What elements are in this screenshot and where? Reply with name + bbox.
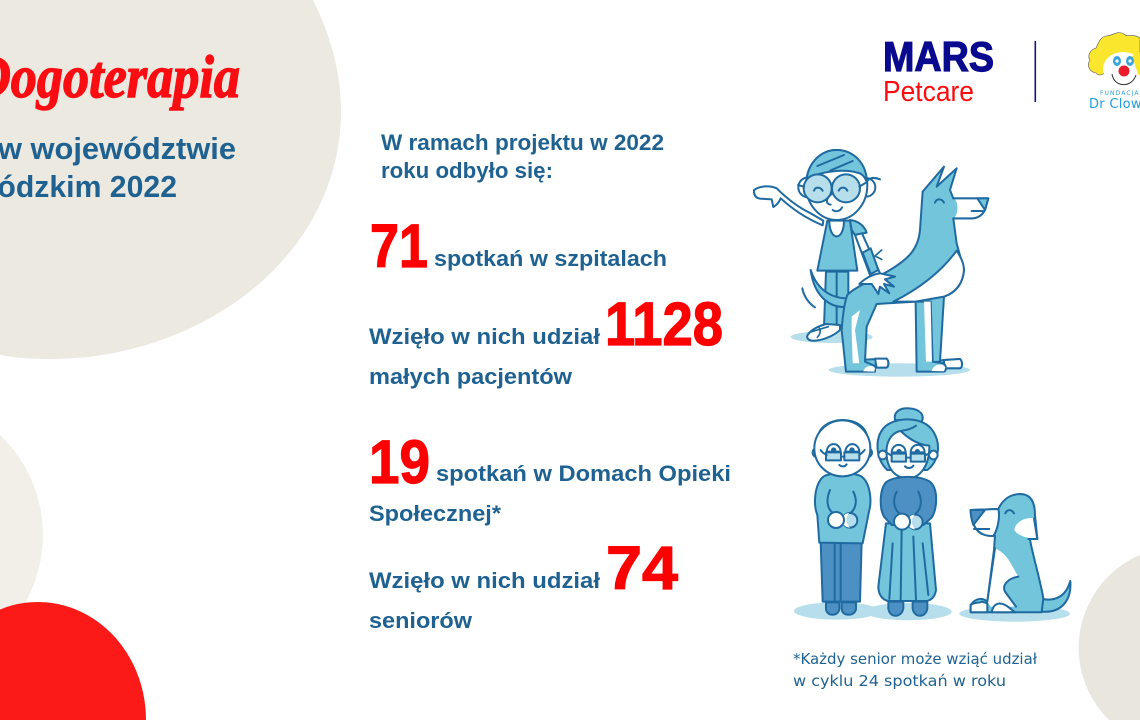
footnote: w cyklu 24 spotkań w roku [793, 672, 1006, 690]
logo: Fundacja Dr Clown: FUNDACJA [1100, 90, 1140, 97]
stat: 71 meetings in hospitals: 71 [370, 212, 428, 280]
subtitle [0, 131, 236, 204]
footnote: *Każdy senior może wziąć udział [793, 650, 1038, 668]
background shape: beige bottom right [1079, 555, 1140, 720]
stat: 74 seniors: Wzięło w nich udział [369, 568, 600, 593]
background shape: large beige [0, 0, 341, 359]
stat: 19 meetings in care homes: spotkań w Domach Opieki [436, 461, 731, 486]
background shape: red bottom left [0, 602, 146, 720]
logo: Fundacja Dr Clown [1088, 33, 1140, 112]
intro text [381, 130, 664, 183]
stat: 71 meetings in hospitals: spotkań w szpitalach [434, 246, 667, 271]
logo divider [1034, 41, 1036, 102]
stat: 71 meetings in hospitals [370, 212, 667, 280]
stat: 1128 young patients: 1128 [605, 290, 723, 358]
logo: Mars Petcare: Petcare [883, 76, 974, 108]
stat: 1128 young patients: małych pacjentów [369, 364, 573, 389]
logo: Mars Petcare [883, 33, 994, 108]
stat: 19 meetings in care homes: Społecznej* [369, 501, 501, 526]
logo: Mars Petcare: MARS [883, 33, 994, 80]
illustration: child with dog [754, 150, 988, 377]
stat: 1128 young patients [369, 290, 723, 389]
intro text: W ramach projektu w 2022 [381, 130, 664, 155]
background shape: small light beige left [0, 435, 43, 635]
illustration: senior couple [794, 408, 1070, 622]
stat: 1128 young patients: Wzięło w nich udział [369, 324, 600, 349]
stat: 74 seniors: 74 [606, 534, 678, 602]
intro text: roku odbyło się: [381, 158, 553, 183]
footnote [793, 650, 1038, 690]
stat: 19 meetings in care homes: 19 [369, 428, 430, 496]
stat: 19 meetings in care homes [369, 428, 731, 526]
subtitle: w województwie [0, 131, 236, 166]
stat: 74 seniors: seniorów [369, 608, 473, 633]
stat: 74 seniors [369, 534, 678, 633]
